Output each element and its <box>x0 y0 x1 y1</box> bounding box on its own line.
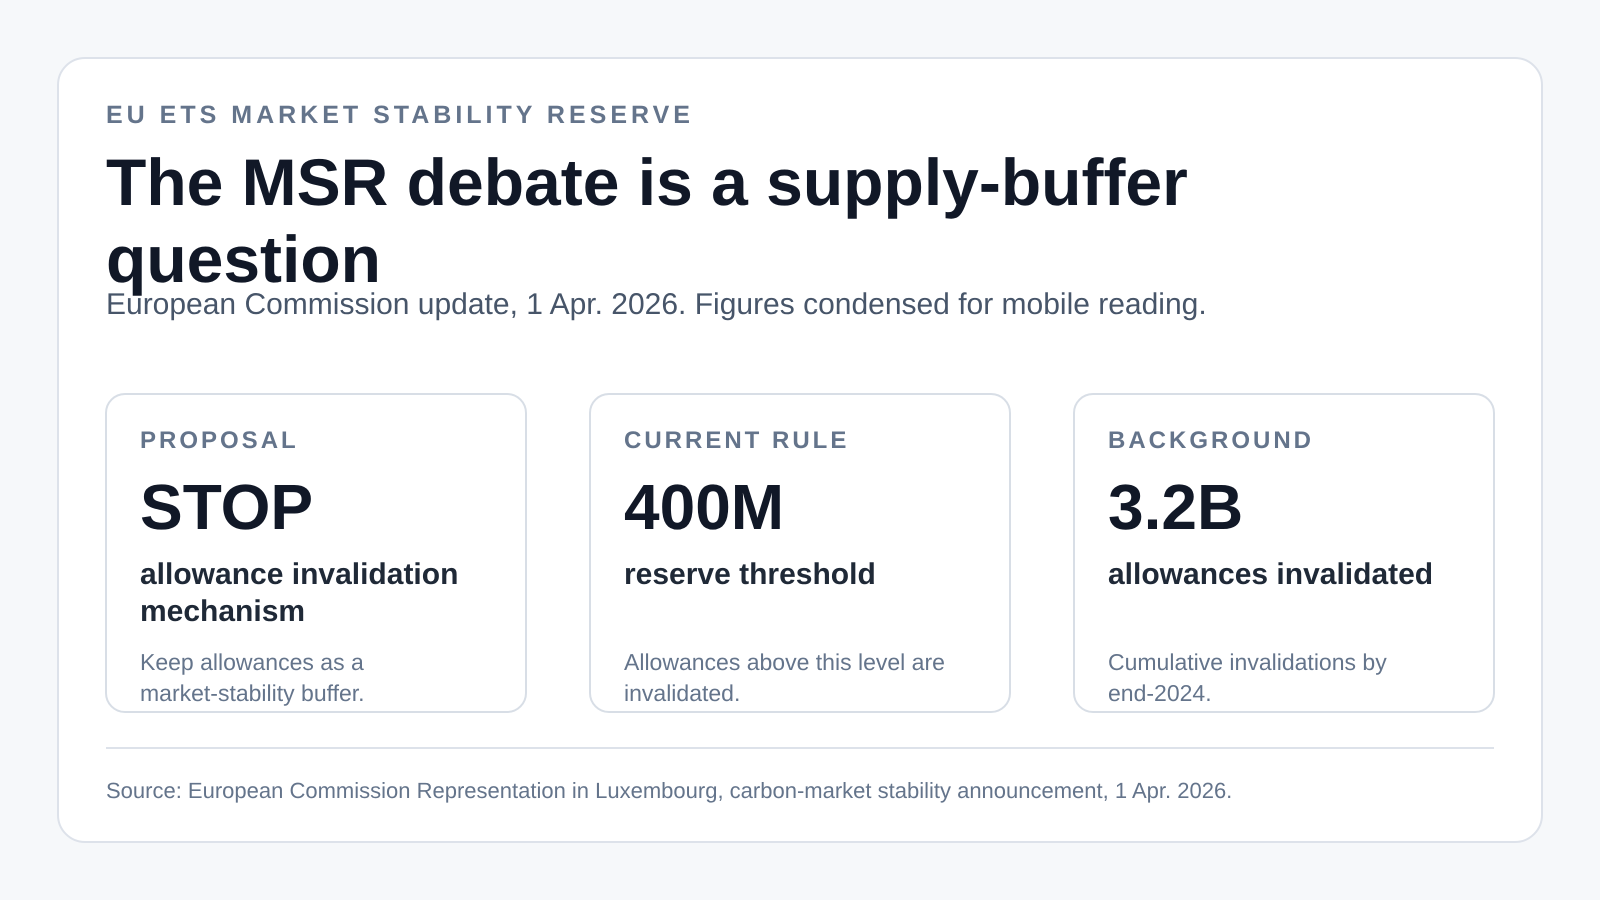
proposal value: STOP <box>140 471 313 543</box>
proposal label: PROPOSAL <box>140 427 299 454</box>
source note: Source: European Commission Representation in Luxembourg, carbon-market stability announcement, 1 Apr. 2026. <box>106 778 1232 803</box>
current rule description <box>624 649 945 706</box>
panel: proposal <box>105 393 527 713</box>
proposal description: market-stability buffer. <box>140 680 365 706</box>
current rule description: Allowances above this level are <box>624 649 945 675</box>
current rule label: CURRENT RULE <box>624 427 849 454</box>
background description <box>1108 649 1387 706</box>
current rule subheading: reserve threshold <box>624 558 876 591</box>
title: question <box>106 222 381 296</box>
background label: BACKGROUND <box>1108 427 1314 454</box>
title <box>106 145 1188 296</box>
panel: background <box>1073 393 1495 713</box>
title: The MSR debate is a supply-buffer <box>106 145 1188 219</box>
proposal description: Keep allowances as a <box>140 649 364 675</box>
background description: end-2024. <box>1108 680 1212 706</box>
current rule description: invalidated. <box>624 680 740 706</box>
proposal subheading: allowance invalidation <box>140 558 458 591</box>
background value: 3.2B <box>1108 471 1243 543</box>
eyebrow heading: EU ETS MARKET STABILITY RESERVE <box>106 101 694 129</box>
proposal subheading: mechanism <box>140 595 305 628</box>
proposal subheading <box>140 558 458 628</box>
panel: current rule <box>589 393 1011 713</box>
background subheading: allowances invalidated <box>1108 558 1433 591</box>
background description: Cumulative invalidations by <box>1108 649 1387 675</box>
subtitle: European Commission update, 1 Apr. 2026. Figures condensed for mobile reading. <box>106 288 1207 321</box>
proposal description <box>140 649 365 706</box>
current rule value: 400M <box>624 471 784 543</box>
